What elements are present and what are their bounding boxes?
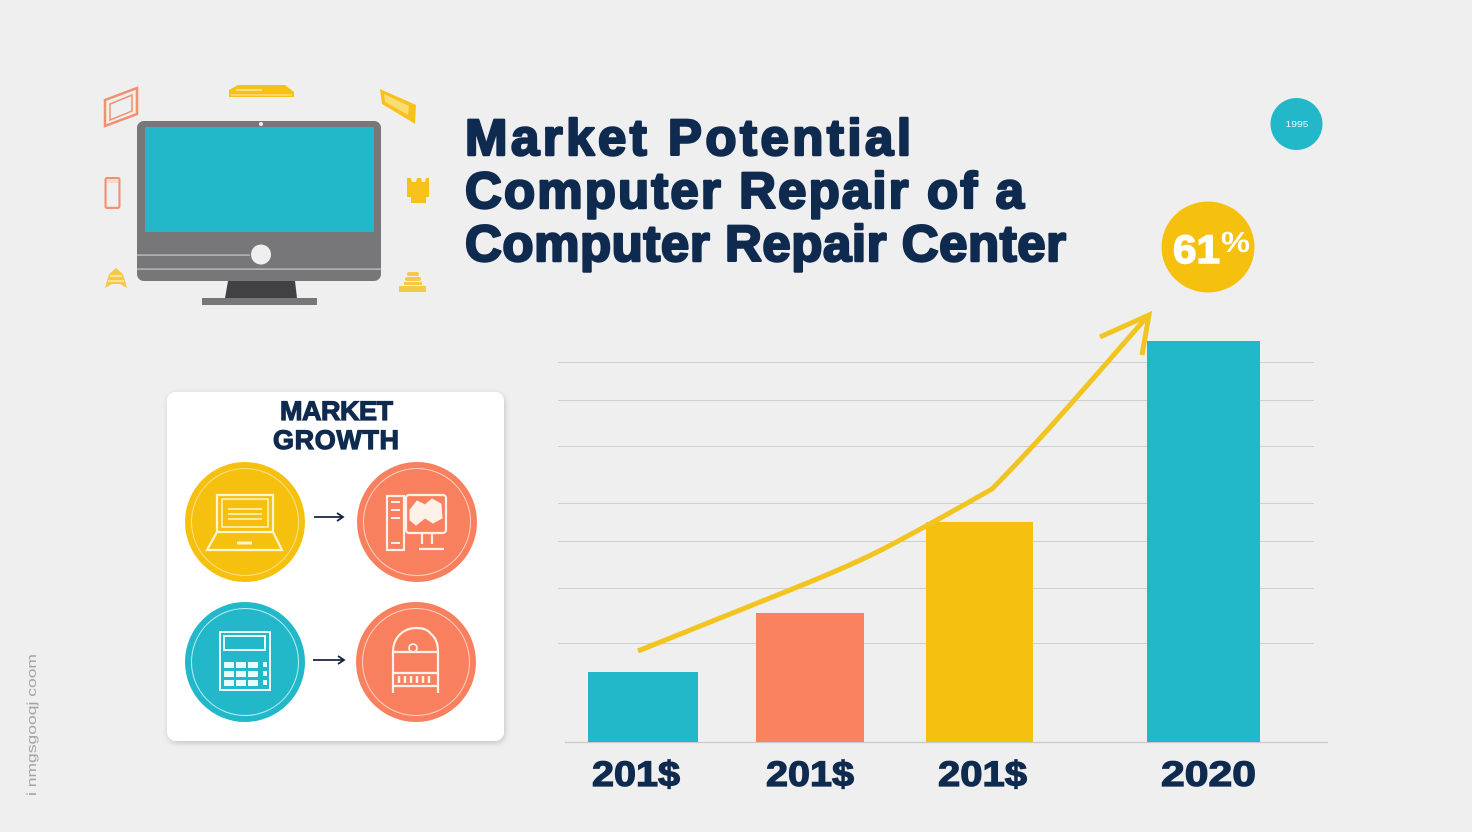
illustration: computer monitor with device icons: [105, 85, 429, 305]
grid lines: [558, 362, 1314, 644]
yellow 61% badge: %: [1221, 227, 1250, 259]
icon: top yellow device: [229, 85, 294, 97]
bar: second 201$: [756, 613, 864, 742]
yellow 61% badge: 61: [1173, 228, 1220, 272]
icon: calculator circle: [185, 602, 305, 722]
icon: game controller: [105, 268, 127, 288]
icon: top right yellow device: [380, 89, 416, 124]
bar chart: [558, 315, 1328, 794]
arrow: laptop to desktop: [314, 513, 343, 521]
icon: laptop circle: [185, 462, 305, 582]
title: Computer Repair of a: [465, 162, 1025, 219]
icon: tablet: [105, 88, 137, 126]
bar: third 201$: [926, 522, 1033, 742]
panel heading: [273, 396, 399, 455]
panel heading: MARKET: [280, 396, 394, 426]
title: [465, 109, 1066, 272]
bar: 2020: [1147, 341, 1260, 742]
title: Market Potential: [465, 109, 911, 166]
panel: market growth: [167, 392, 504, 741]
small teal badge: [1270, 98, 1322, 150]
monitor: [137, 121, 381, 305]
axis labels: 2020: [1161, 755, 1256, 794]
panel heading: GROWTH: [273, 425, 399, 455]
title: Computer Repair Center: [465, 215, 1066, 272]
axis labels: 201$: [938, 755, 1027, 794]
arrow: calculator to hardware: [313, 656, 344, 664]
icon: stacked device: [399, 272, 426, 292]
icon: hardware unit circle: [356, 602, 476, 722]
bar: first 201$: [588, 672, 698, 742]
icon: desktop computer circle: [357, 462, 477, 582]
icon: phone: [106, 178, 120, 208]
yellow 61% badge: [1162, 202, 1254, 292]
axis labels: 201$: [766, 755, 854, 794]
axis labels: 201$: [592, 755, 680, 794]
axis labels: [592, 755, 1256, 794]
trend arrow: [638, 315, 1149, 651]
icon: right yellow chip: [407, 178, 429, 203]
small teal badge: 1995: [1286, 120, 1309, 129]
vertical side caption: i nmgsgooqj coom: [24, 654, 39, 796]
